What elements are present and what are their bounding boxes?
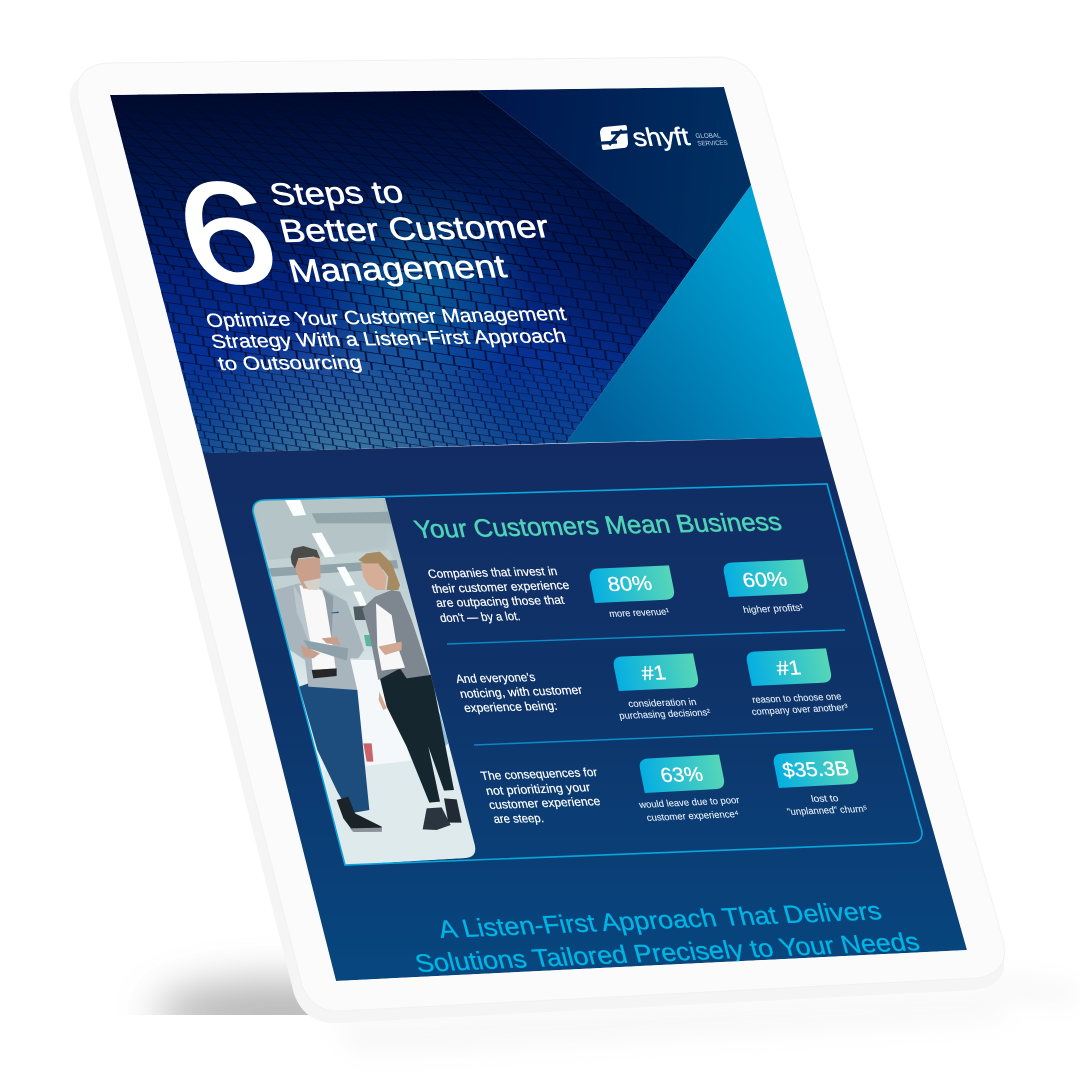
stat: #1 reason to choose one company over another: company over another³ [751, 702, 850, 718]
row 3 intro text: The consequences for [479, 765, 599, 783]
stat: 63% would leave due to poor customer experience: 63% [659, 764, 705, 787]
title: 6 Steps to Better Customer Management: Better Customer [276, 209, 553, 249]
stat: #1 consideration in purchasing decisions: consideration in [627, 697, 698, 710]
panel outline [253, 484, 922, 865]
logo: shyft global services: shyft [630, 123, 692, 152]
stat: #1 reason to choose one company over another: reason to choose one [751, 692, 843, 706]
tablet drop shadow [144, 958, 308, 1015]
stat: 63% would leave due to poor customer experience: would leave due to poor [637, 795, 742, 811]
logo: shyft global services [600, 125, 728, 151]
divider [447, 630, 845, 644]
title: 6 Steps to Better Customer Management: Management [285, 248, 510, 289]
divider [474, 729, 873, 745]
logo: shyft global services: GLOBAL [695, 133, 722, 140]
row 1 intro text: don't — by a lot. [438, 609, 522, 625]
stat: 60% higher profits: higher profits¹ [742, 603, 805, 616]
title: 6 Steps to Better Customer Management [185, 181, 548, 286]
row 2 intro text [454, 670, 584, 715]
section heading: a listen-first approach: Solutions Tailored Precisely to Your Needs [412, 928, 923, 978]
subtitle [204, 304, 569, 375]
man legs [299, 673, 369, 813]
stat: $35.3B lost to unplanned churn: $35.3B [781, 758, 851, 782]
hero mesh background [110, 90, 697, 453]
tablet screen [110, 87, 967, 981]
row 3 intro text: are steep. [492, 811, 545, 826]
dark navy corner panel [477, 87, 751, 260]
row 1 intro text: their customer experience [430, 578, 571, 596]
subtitle: to Outsourcing [216, 353, 364, 375]
stat: 80% more revenue: 80% [606, 573, 654, 596]
stat: 63% would leave due to poor customer experience: customer experience⁴ [646, 809, 740, 824]
stat: 80% more revenue [588, 565, 676, 620]
woman jacket [362, 590, 430, 680]
man jacket [275, 583, 364, 690]
row 2 intro text: experience being: [462, 699, 559, 715]
stat: #1 reason to choose one company over another: #1 [775, 657, 803, 680]
title: 6 Steps to Better Customer Management: Steps to [266, 175, 407, 212]
upper bodies, crop coordinates [275, 546, 430, 710]
photo: two colleagues walking in a warehouse [245, 495, 485, 870]
row 3 intro text [479, 765, 602, 826]
tablet body [70, 57, 1005, 1023]
stat: #1 consideration in purchasing decisions: #1 [640, 662, 668, 685]
cyan triangle [566, 185, 822, 443]
row 2 intro text: noticing, with customer [458, 683, 584, 701]
row 3 intro text: not prioritizing your [484, 780, 592, 798]
stat: #1 consideration in purchasing decisions [612, 653, 713, 722]
icon: shyft mark [600, 125, 628, 150]
stat: #1 consideration in purchasing decisions: purchasing decisions² [618, 707, 713, 722]
row 1 intro text [426, 564, 571, 625]
row 1 intro text: Companies that invest in [426, 564, 559, 581]
row 2 intro text: And everyone's [454, 670, 537, 686]
subtitle: Optimize Your Customer Management [204, 304, 569, 332]
stat: $35.3B lost to unplanned churn: "unplanned" churn⁵ [786, 804, 869, 818]
stat: 80% more revenue: more revenue¹ [608, 607, 671, 620]
panel: your customers mean business [245, 484, 922, 870]
row 3 intro text: customer experience [487, 794, 602, 812]
lower page background [203, 437, 967, 981]
stat: 60% higher profits: 60% [741, 569, 789, 592]
section heading: a listen-first approach: A Listen-First Approach That Delivers [435, 897, 885, 944]
subtitle: Strategy With a Listen-First Approach [209, 326, 568, 353]
stat: $35.3B lost to unplanned churn: lost to [810, 793, 840, 805]
title: 6 Steps to Better Customer Management: 6 [161, 153, 293, 314]
stat: #1 reason to choose one company over another [745, 648, 850, 718]
logo: shyft global services: SERVICES [697, 140, 729, 147]
stat: 63% would leave due to poor customer experience [637, 755, 742, 824]
stat: $35.3B lost to unplanned churn [772, 750, 869, 818]
woman legs [378, 668, 454, 803]
section heading: a listen-first approach [416, 902, 920, 972]
row 1 intro text: are outpacing those that [434, 593, 566, 610]
heading: Your Customers Mean Business [412, 508, 784, 544]
stat: 60% higher profits [722, 559, 810, 616]
